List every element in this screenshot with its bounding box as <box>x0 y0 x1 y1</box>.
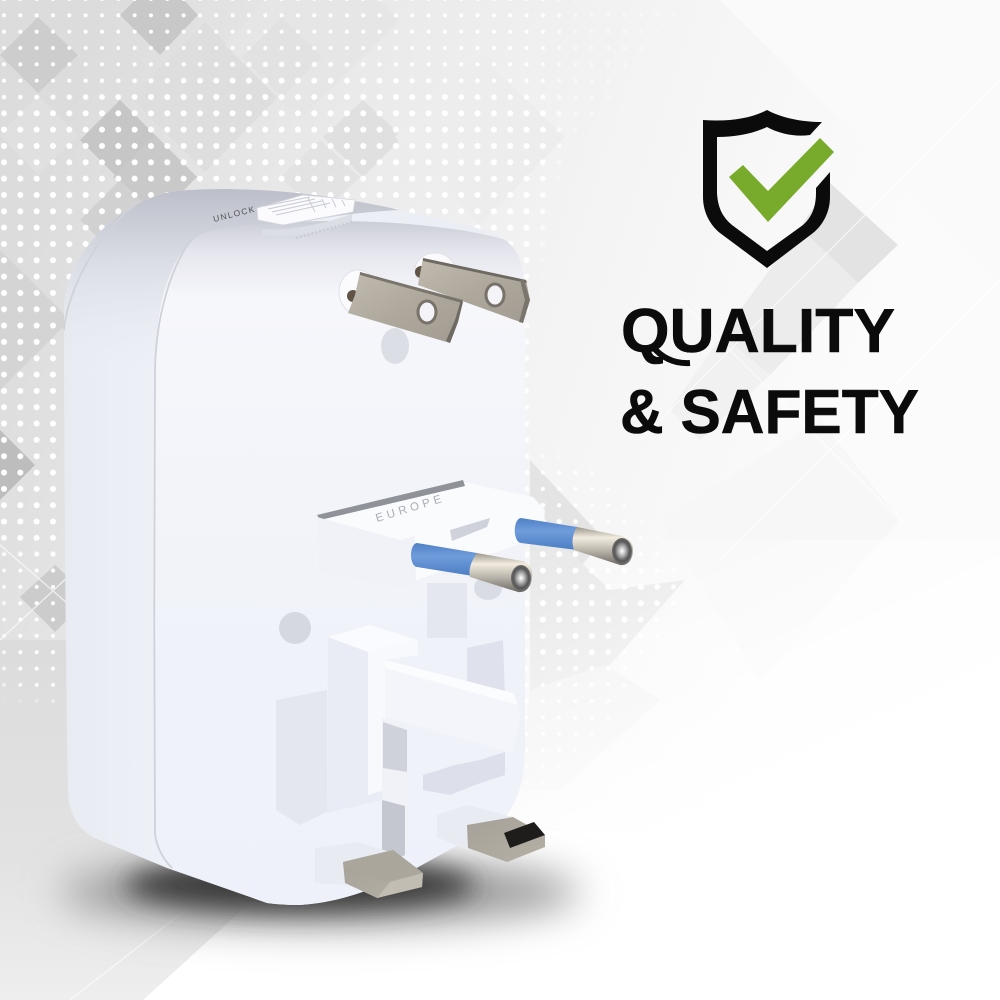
check mark <box>729 138 834 222</box>
switch <box>212 195 355 238</box>
US plug: rear blade <box>415 253 530 323</box>
lower-left grey wedge <box>0 640 280 1000</box>
title: quality and safety: & SAFETY <box>620 378 919 447</box>
body: side shell <box>64 189 525 905</box>
European pin: right <box>515 518 633 565</box>
title: quality and safety: QUALITY <box>621 297 895 366</box>
shield outline <box>703 110 830 268</box>
hole: left <box>279 612 311 644</box>
body: front face <box>154 221 525 905</box>
seam <box>64 205 195 868</box>
European pin: left <box>411 543 532 592</box>
switch: UNLOCK <box>212 204 256 224</box>
UK earth blade <box>385 660 520 753</box>
UK blade: right <box>437 805 545 862</box>
lower fade to white <box>440 540 1000 1000</box>
adapter device <box>64 189 633 905</box>
icon: shield with check mark <box>703 110 834 268</box>
hole: upper <box>381 328 409 364</box>
body: top shading <box>64 189 400 380</box>
UK socket recess <box>276 625 505 860</box>
hole: under pin <box>474 576 502 600</box>
UK blade: left <box>315 842 423 898</box>
US plug: front blade <box>339 270 463 343</box>
title: quality and safety <box>620 297 919 447</box>
Europe module: EUROPE <box>374 493 443 525</box>
Europe module <box>317 480 545 638</box>
floor shadow <box>60 858 580 926</box>
